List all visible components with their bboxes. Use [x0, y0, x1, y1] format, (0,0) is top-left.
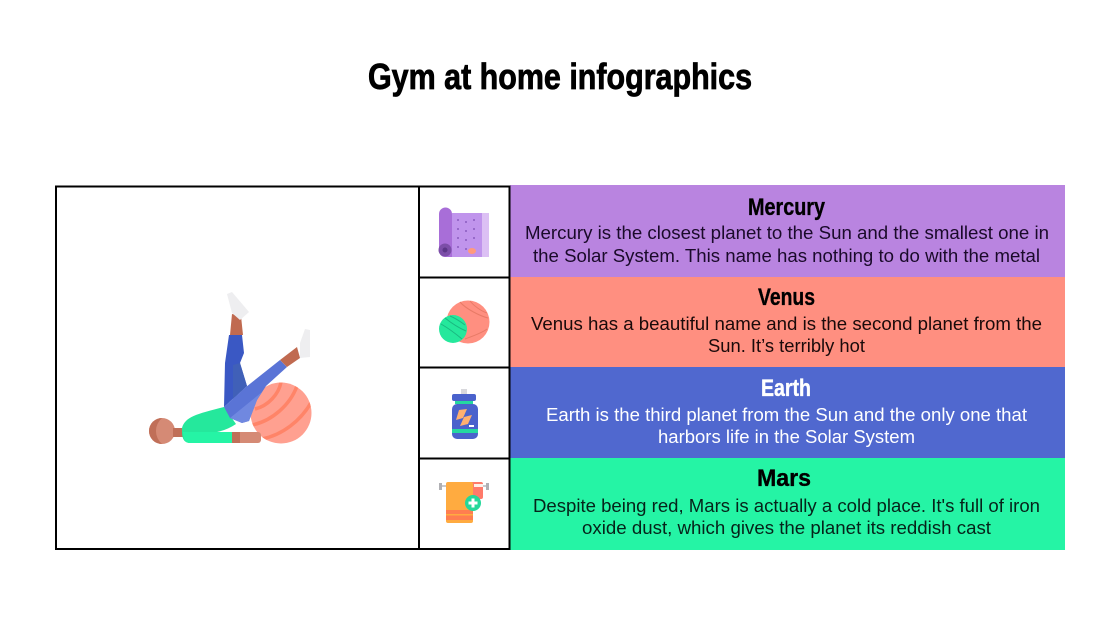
green outfit [182, 407, 236, 443]
panel: Mars band [510, 458, 1065, 550]
title: Gym at home infographics [368, 56, 752, 97]
icon: towel on rack [439, 482, 489, 523]
panel: Venus band: Venus [758, 284, 815, 311]
panel: Mars band: oxide dust, which gives the planet its reddish cast [582, 518, 991, 538]
raised leg [224, 292, 249, 407]
panel: Mercury band [510, 185, 1065, 277]
icon: two exercise balls [439, 300, 490, 344]
head [149, 418, 183, 444]
panel: Venus band: Venus has a beautiful name and is the second planet from the [531, 314, 1042, 334]
panel: Venus band: Sun. It’s terribly hot [708, 336, 865, 356]
icon: exercise ball [250, 382, 312, 444]
panel: Mercury band: Mercury [748, 194, 826, 221]
panel: Earth band: Earth is the third planet from the Sun and the only one that [546, 405, 1027, 425]
panel: Earth band: harbors life in the Solar System [658, 427, 915, 447]
panel: Earth band [510, 367, 1065, 458]
illustration: woman exercising with ball [149, 292, 312, 444]
panel: Venus band [510, 277, 1065, 367]
panel: Mercury band: the Solar System. This name has nothing to do with the metal [533, 246, 1040, 266]
panel: Earth band: Earth [761, 375, 811, 402]
panel: Mercury band: Mercury is the closest planet to the Sun and the smallest one in [525, 223, 1049, 243]
icon: yoga mat [438, 208, 489, 257]
icon: supplement bottle [452, 389, 478, 439]
panel: Mars band: Mars [757, 465, 811, 492]
forearm [232, 432, 261, 443]
panel: black outline grid [56, 186, 510, 549]
panel: Mars band: Despite being red, Mars is actually a cold place. It's full of iron [533, 496, 1040, 516]
leg on ball [224, 329, 310, 423]
